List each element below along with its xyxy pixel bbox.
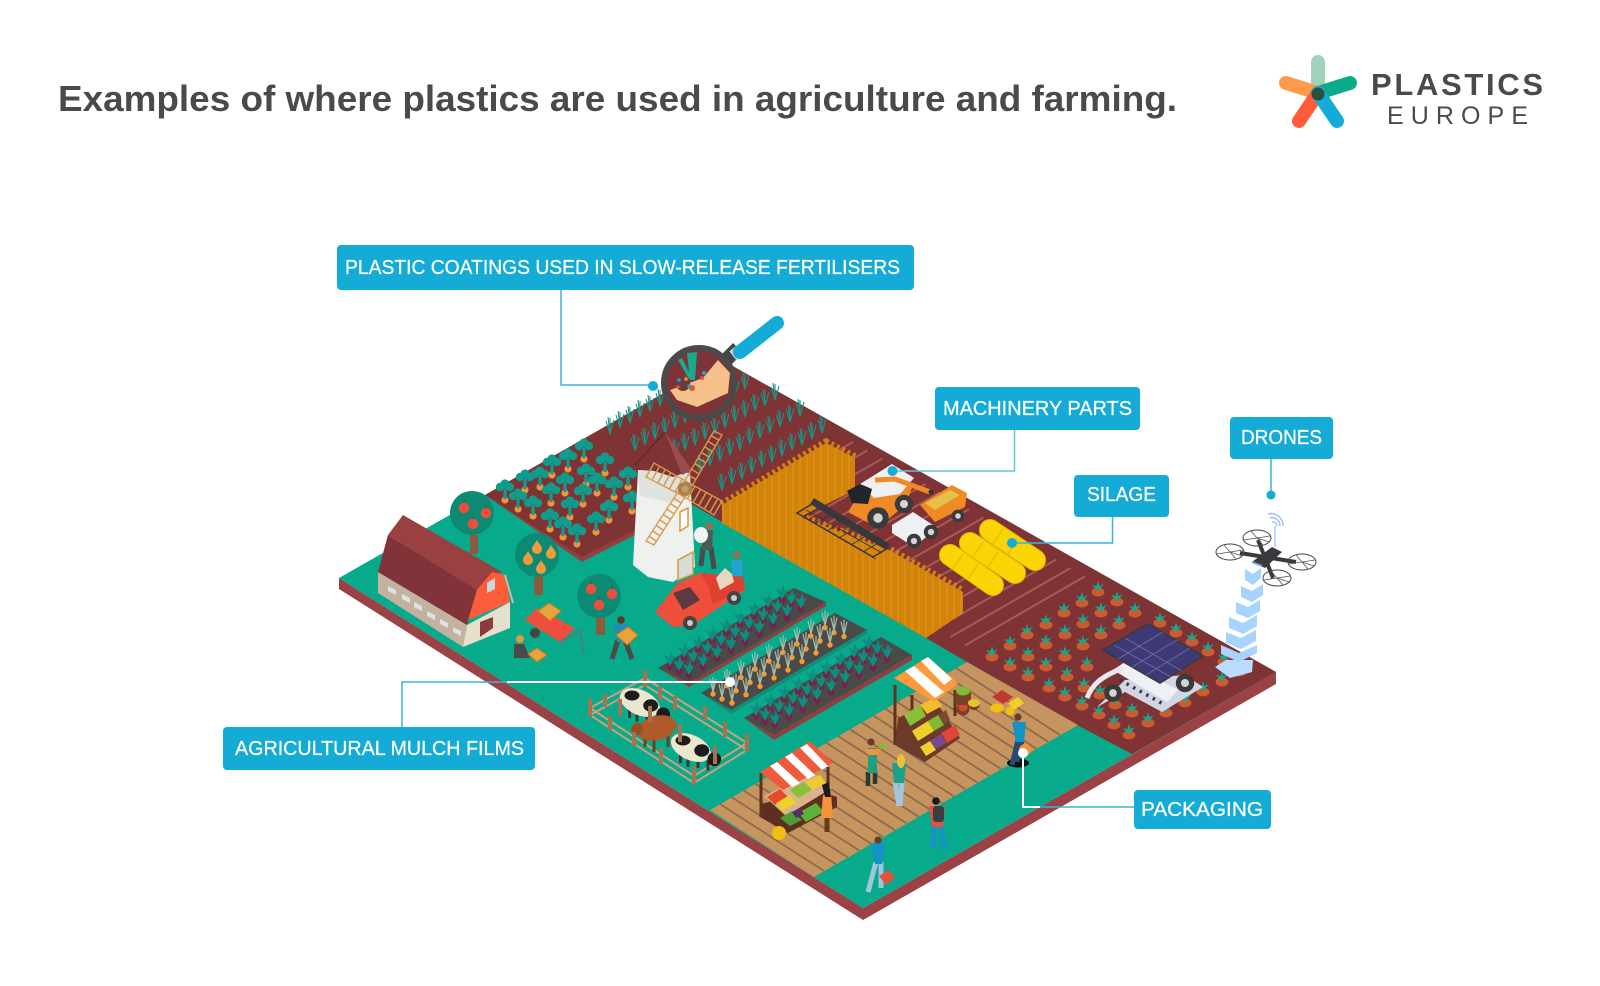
label box: [1230, 417, 1333, 459]
orchard of leafy crops: [496, 438, 641, 548]
pear tree: [515, 533, 559, 595]
label box: [337, 245, 914, 290]
barn: [378, 515, 513, 647]
label box: [935, 387, 1140, 430]
carrot sprouts field: [986, 581, 1246, 740]
farmer carrying sack: [694, 522, 714, 569]
market stall: orange awning: [894, 657, 960, 762]
label: packaging: [1018, 748, 1271, 829]
farmer carrying crate: [612, 616, 638, 659]
label: drones: [1230, 417, 1333, 500]
anchor dot: [1018, 748, 1028, 758]
anchor dot: [648, 381, 658, 391]
bed: beetroot: [744, 635, 912, 740]
green ground: [339, 360, 1276, 908]
windmill: [633, 431, 722, 582]
anchor dot: [725, 677, 735, 687]
bed: beetroot: [658, 585, 826, 687]
brown crop land: [485, 360, 1276, 754]
leader line: [1040, 806, 1134, 808]
solar field robot: [1087, 624, 1203, 712]
leader line on ground: [507, 681, 730, 683]
shopper at red stall: [821, 782, 833, 832]
logo wordmark: Plastics: PLASTICS: [1371, 67, 1543, 102]
leader line: [1270, 459, 1272, 495]
icon: drone: [1216, 514, 1316, 586]
shopper with orange bag: [1007, 713, 1031, 768]
leader line: [892, 429, 1014, 471]
crouching worker with crate: [514, 635, 547, 662]
man with backpack: [929, 797, 945, 849]
label box: [223, 727, 535, 770]
logo wordmark: Europe: EUROPE: [1387, 102, 1528, 130]
label: machinery parts: [888, 387, 1140, 476]
silage bales: [950, 529, 1035, 585]
vendor in green apron: [866, 738, 886, 786]
label text: MACHINERY PARTS: [943, 398, 1132, 420]
label box: [1134, 790, 1271, 829]
label text: SILAGE: [1087, 484, 1156, 506]
market stall: red awning: [760, 741, 837, 840]
isometric farm platform: [339, 323, 1316, 920]
title: Examples of where plastics are used in agriculture and farming.: [58, 78, 1177, 119]
white tractor and orange trailer: [892, 485, 967, 548]
drone scanning beam: [1215, 568, 1263, 678]
leader line: [1012, 517, 1112, 543]
brown cow: [631, 711, 679, 752]
wheat field: [722, 443, 963, 638]
label: plastic coatings: [337, 245, 914, 391]
anchor dot: [888, 466, 898, 476]
label text: DRONES: [1241, 427, 1322, 449]
bed: onions: [701, 611, 867, 714]
cows in fenced paddock: [590, 670, 747, 785]
icon: logo star: [1286, 62, 1350, 121]
red trailer with crate: [525, 603, 584, 653]
platform sides: [339, 578, 1276, 920]
woman with blond hair: [892, 754, 906, 806]
label text: PACKAGING: [1141, 799, 1263, 821]
leek rows: [606, 372, 826, 490]
vegetable beds: [658, 585, 912, 740]
wooden market floor: [710, 662, 1078, 877]
label text: PLASTIC COATINGS USED IN SLOW-RELEASE FERTILISERS: [345, 257, 900, 279]
apple tree: [577, 574, 621, 635]
label: agricultural mulch films: [223, 677, 735, 770]
label text: AGRICULTURAL MULCH FILMS: [235, 738, 524, 760]
man carrying basket: [868, 836, 895, 892]
anchor dot: [1007, 538, 1017, 548]
label box: [1074, 475, 1169, 517]
combine harvester: [797, 464, 934, 559]
produce barrels and crates: [955, 686, 1024, 716]
anchor dot: [1266, 490, 1276, 500]
magnifier: fertiliser in hand: [664, 323, 777, 418]
leader line: [402, 682, 507, 727]
label: silage: [1007, 475, 1169, 548]
red pickup truck: [655, 552, 745, 630]
cow: [666, 727, 721, 770]
leader line: [561, 290, 653, 385]
ploughed furrows: [733, 442, 1085, 645]
apple tree: [450, 491, 494, 554]
leader line on ground: [1023, 753, 1040, 807]
logo: Plastics Europe: [1286, 62, 1543, 130]
cow: [615, 682, 670, 726]
